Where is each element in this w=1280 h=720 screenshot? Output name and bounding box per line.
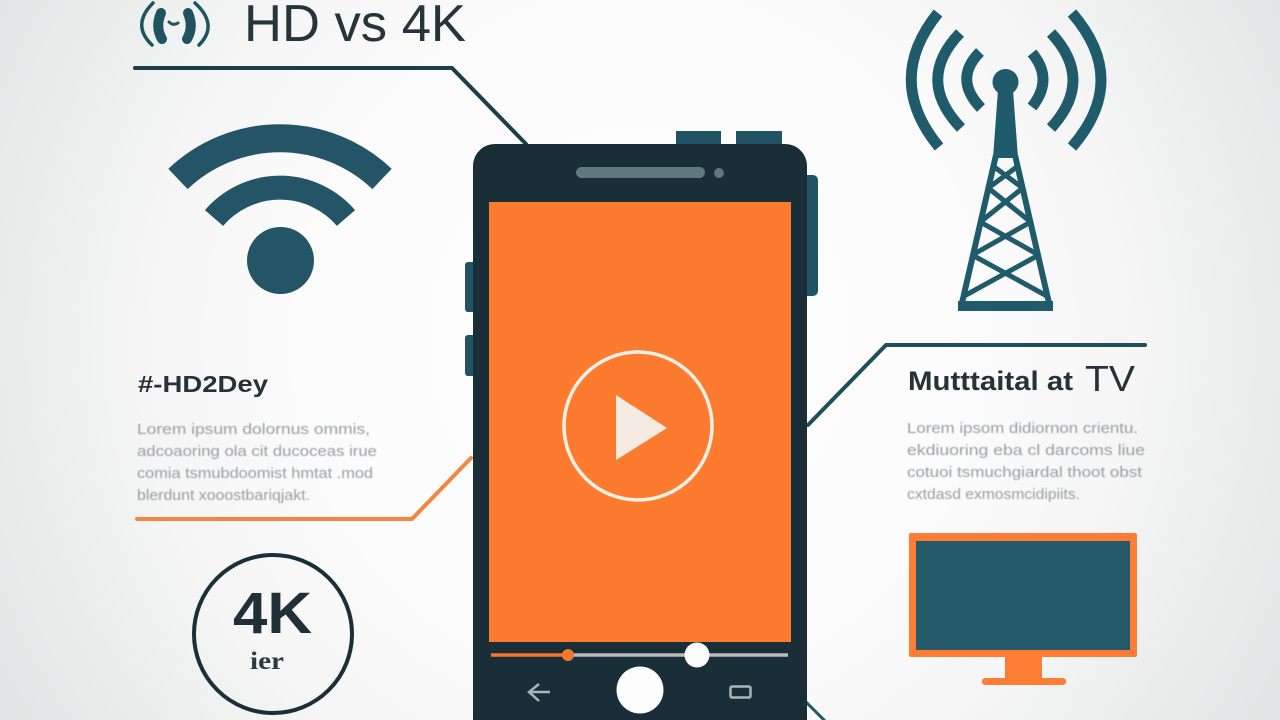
right body text: ekdiuoring eba cl darcoms liue <box>907 443 1145 459</box>
play button <box>564 352 712 500</box>
camera <box>714 168 724 178</box>
left body text <box>137 422 377 504</box>
right body text: cotuoi tsmuchgiardal thoot obst <box>907 465 1142 481</box>
left body text: Lorem ipsum dolornus ommis, <box>137 422 370 438</box>
phone <box>465 131 818 720</box>
nav: back <box>529 684 550 701</box>
icon: TV <box>909 533 1137 685</box>
icon: broadcast tower <box>911 13 1101 306</box>
left body text: adcoaoring ola cit ducoceas irue <box>137 444 377 460</box>
nav: recents <box>730 686 750 698</box>
connector: bottom right <box>804 700 826 720</box>
right heading: TV <box>1085 358 1135 399</box>
connector: orange text to phone <box>137 458 471 519</box>
nav: home <box>616 666 664 714</box>
left body text: comia tsmubdoomist hmtat .mod <box>137 466 373 482</box>
4K badge: ier <box>250 648 284 675</box>
4K badge <box>194 555 352 713</box>
right heading <box>908 358 1135 399</box>
phone side and top buttons <box>465 131 818 376</box>
icon: wifi <box>178 138 382 294</box>
right body text <box>907 421 1145 503</box>
icon: broadcast signal <box>142 3 208 45</box>
4K badge: 4K <box>233 581 312 646</box>
connector: right panel to phone <box>808 345 1145 425</box>
left body text: blerdunt xooostbariqjakt. <box>137 488 310 504</box>
connector: title to phone <box>135 68 526 144</box>
progress bar <box>491 642 788 668</box>
phone body <box>473 144 807 720</box>
left heading: #-HD2Dey <box>138 371 268 397</box>
right body text: Lorem ipsom didiornon crientu. <box>907 421 1138 437</box>
screen <box>489 202 791 642</box>
speaker <box>576 167 705 178</box>
right heading: Mutttaital at <box>908 366 1073 396</box>
right body text: cxtdasd exmosmcidipiits. <box>907 487 1080 503</box>
